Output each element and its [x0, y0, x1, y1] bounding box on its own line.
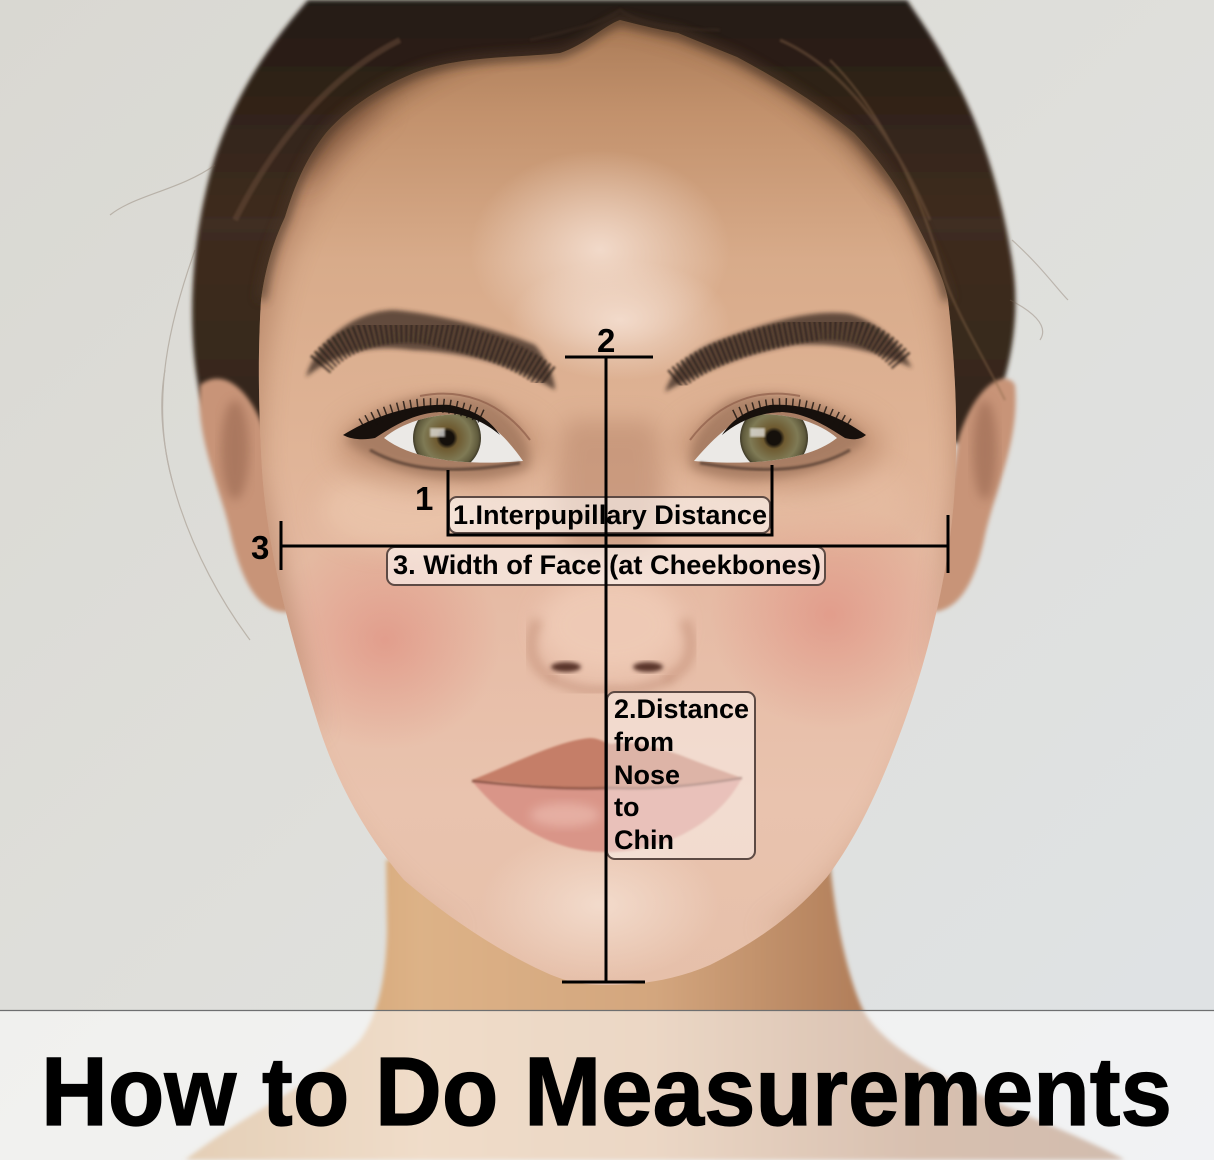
label: distance from nose to chin: Chin	[614, 825, 674, 855]
label: distance from nose to chin: from	[614, 727, 674, 757]
icon: right eyebrow	[665, 313, 912, 392]
number 2: 2	[597, 322, 615, 359]
icon: nose	[531, 420, 691, 691]
measurement 2: nose to chin line	[562, 322, 653, 982]
label: width of face: 3. Width of Face (at Cheekbones)	[393, 550, 821, 580]
hair	[110, 0, 1068, 640]
icon: left eyebrow	[306, 310, 555, 390]
wispy flyaway hairs	[110, 165, 1068, 640]
title: How to Do Measurements	[41, 1037, 1172, 1146]
shoulders and neck	[185, 860, 1125, 1160]
label: distance from nose to chin: to	[614, 792, 639, 822]
title band	[0, 1010, 1214, 1160]
hair strands	[235, 10, 1005, 400]
number 1: 1	[415, 480, 433, 517]
label: distance from nose to chin: Nose	[614, 760, 680, 790]
icon: right eye	[690, 394, 866, 479]
label: distance from nose to chin	[607, 692, 755, 859]
measurement 1: interpupillary bracket	[415, 465, 772, 535]
label: interpupillary distance: 1.Interpupillary Distance	[453, 500, 767, 530]
hairline soft edge	[261, 20, 948, 300]
label: distance from nose to chin: 2.Distance	[614, 694, 749, 724]
face	[258, 20, 956, 985]
ears	[199, 379, 1016, 612]
number 3: 3	[251, 529, 269, 566]
measurement 3: face width line	[251, 515, 948, 573]
icon: lips	[472, 738, 742, 852]
icon: left eye	[343, 394, 530, 479]
